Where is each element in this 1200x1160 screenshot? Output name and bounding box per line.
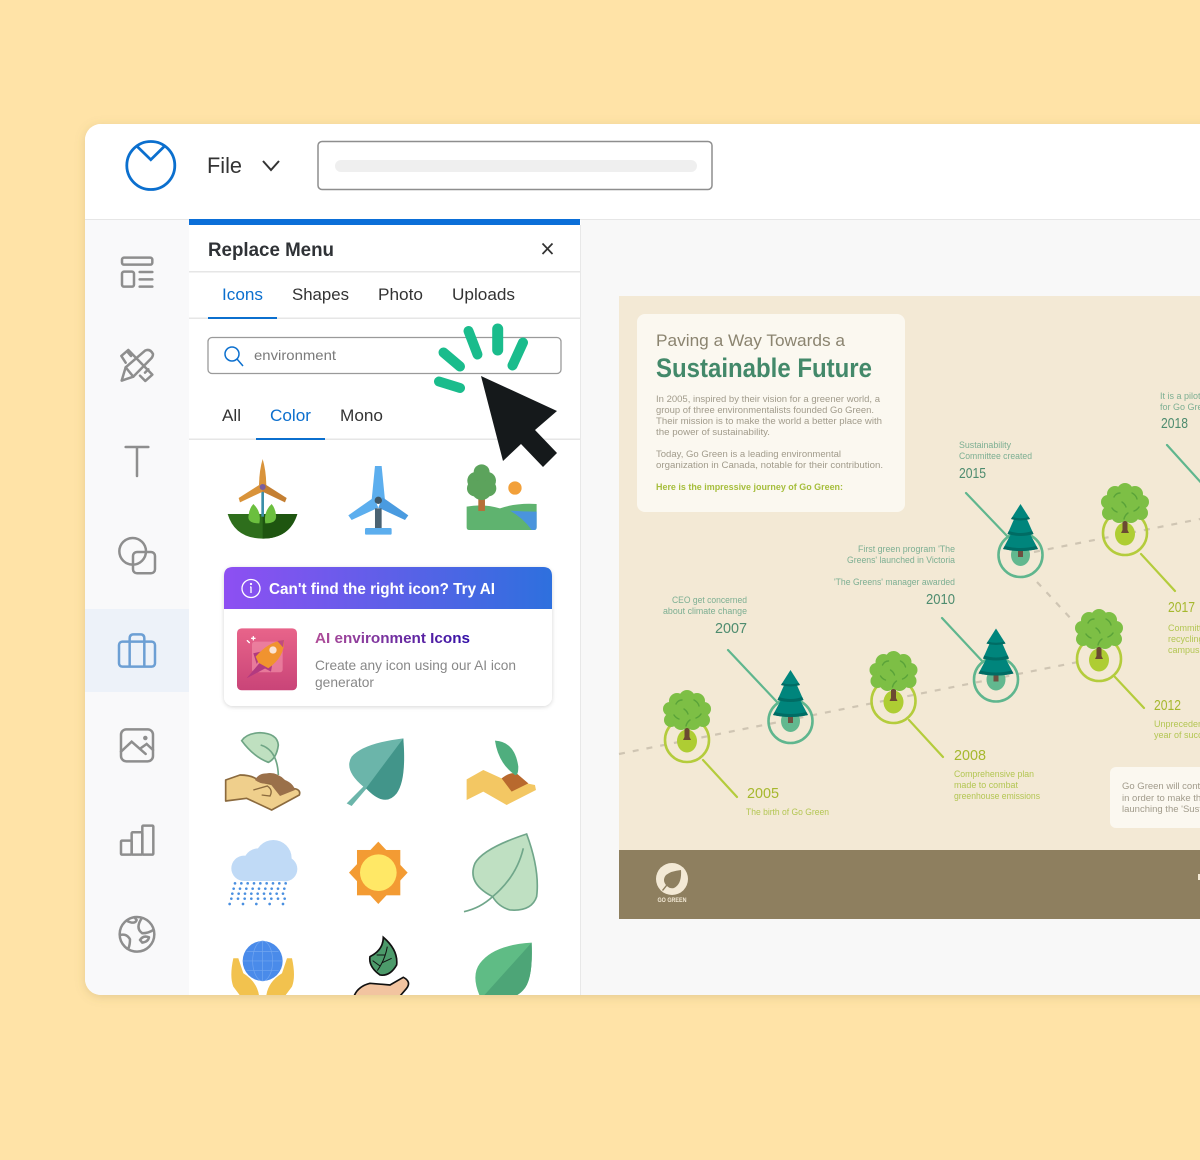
milestone 2007 text: CEO get concerned bbox=[672, 595, 747, 605]
milestone 2005 text bbox=[746, 785, 829, 817]
icon: image bbox=[121, 729, 153, 761]
app window bbox=[85, 124, 1200, 1000]
milestone 2007 text: 2007 bbox=[715, 620, 747, 637]
icon: rain cloud bbox=[230, 840, 297, 904]
milestone 2012 tree bbox=[1075, 609, 1123, 681]
card description: Create any icon using our AI icon bbox=[315, 657, 516, 673]
rocket thumbnail bbox=[237, 628, 297, 690]
icon: landscape bbox=[467, 464, 537, 530]
milestone 2010 text: 'The Greens' manager awarded bbox=[834, 577, 955, 587]
milestone 2007 text bbox=[663, 595, 747, 637]
card description: generator bbox=[315, 674, 374, 690]
milestone 2015 text: Committee created bbox=[959, 451, 1032, 461]
footer logo: GO GREEN bbox=[658, 898, 686, 904]
milestone 2010 text: 2010 bbox=[926, 591, 955, 608]
icon: green click sparks bbox=[439, 329, 523, 388]
intro body: group of three environmentalists founded Go Green. bbox=[656, 405, 874, 415]
sidebar bbox=[85, 219, 189, 995]
icon: teal leaf bbox=[347, 738, 404, 806]
milestone 2007 tree bbox=[768, 670, 812, 743]
info icon bbox=[242, 580, 260, 598]
close icon bbox=[542, 244, 552, 254]
icon: design tools bbox=[121, 350, 153, 381]
milestone 2012 text: 2012 bbox=[1154, 697, 1181, 714]
heading: Replace Menu bbox=[208, 240, 334, 261]
card description bbox=[315, 657, 516, 690]
tabs: Photo bbox=[378, 285, 423, 304]
intro body: the power of sustainability. bbox=[656, 427, 770, 437]
icon: hands holding globe bbox=[231, 941, 294, 1000]
closing note card bbox=[1110, 767, 1200, 828]
icon: outlined light leaf bbox=[464, 834, 537, 912]
milestone 2017 tree bbox=[1101, 483, 1149, 555]
footer band bbox=[619, 850, 1200, 919]
milestone 2015 text: Sustainability bbox=[959, 440, 1011, 450]
intro body: Their mission is to make the world a better place with bbox=[656, 416, 882, 426]
logo bbox=[127, 142, 175, 190]
intro body bbox=[656, 394, 883, 470]
milestone 2008 text: made to combat bbox=[954, 780, 1018, 790]
icon: yellow hand with seedling bbox=[467, 741, 536, 805]
card title: AI environment Icons bbox=[315, 630, 470, 647]
milestone 2008 tree bbox=[870, 651, 918, 723]
milestone 2010 text: Greens' launched in Victoria bbox=[847, 555, 955, 565]
search box bbox=[208, 338, 561, 374]
icon: hand with sprout bbox=[226, 733, 300, 810]
icon: wind turbine with leaves bbox=[228, 459, 297, 539]
milestone 2007 text: about climate change bbox=[663, 606, 747, 616]
filter tabs: Color bbox=[270, 406, 311, 425]
icon: text bbox=[126, 447, 148, 476]
milestone 2010 text bbox=[834, 544, 955, 608]
intro heading: Paving a Way Towards a bbox=[656, 331, 846, 350]
leader lines bbox=[703, 445, 1200, 797]
icon: templates bbox=[122, 258, 152, 287]
icon: blue wind turbine bbox=[348, 466, 408, 535]
icon: green leaf bbox=[475, 943, 532, 1000]
icon: sun bbox=[349, 842, 408, 904]
icon: mouse cursor arrow bbox=[481, 376, 557, 467]
panel: infographic document bbox=[619, 296, 1200, 919]
filter tabs: All bbox=[222, 406, 241, 425]
icon: chart bbox=[121, 826, 153, 855]
milestone 2015 text bbox=[959, 440, 1032, 482]
AI suggestion card bbox=[224, 567, 552, 706]
intro body: In 2005, inspired by their vision for a greener world, a bbox=[656, 394, 880, 404]
milestone 2008 text: Comprehensive plan bbox=[954, 769, 1034, 779]
card header bbox=[224, 567, 552, 609]
intro body: Today, Go Green is a leading environmental bbox=[656, 449, 841, 459]
milestone 2010 text: First green program 'The bbox=[858, 544, 955, 554]
milestone 2015 text: 2015 bbox=[959, 465, 986, 482]
icon: globe bbox=[120, 917, 154, 952]
milestone 2018 text bbox=[1160, 391, 1200, 432]
tabs bbox=[224, 288, 514, 304]
milestone 2005 tree bbox=[663, 690, 711, 762]
tabs: Shapes bbox=[292, 285, 349, 304]
tabs: Icons bbox=[222, 285, 263, 304]
milestone 2018 text: 2018 bbox=[1161, 415, 1188, 432]
intro call to action: Here is the impressive journey of Go Green: bbox=[656, 482, 843, 492]
milestone 2005 text: 2005 bbox=[747, 785, 779, 802]
icon: shapes bbox=[119, 538, 155, 573]
milestone 2008 text: greenhouse emissions bbox=[954, 791, 1040, 801]
card header text: Can't find the right icon? Try AI bbox=[269, 581, 495, 598]
intro body: organization in Canada, notable for their contribution. bbox=[656, 460, 883, 470]
panel: replace menu bbox=[189, 219, 580, 1000]
tabs: Uploads bbox=[452, 285, 515, 304]
milestone 2005 text: The birth of Go Green bbox=[746, 807, 829, 817]
milestone 2008 text bbox=[954, 747, 1040, 801]
milestone 2017 text bbox=[1168, 599, 1200, 655]
filter tabs bbox=[222, 409, 382, 421]
file menu: File bbox=[207, 153, 242, 178]
icon: leaf over outlined hand bbox=[353, 937, 409, 1000]
milestone 2010 tree bbox=[974, 628, 1018, 702]
icon: elements briefcase bbox=[119, 634, 155, 667]
timeline dashed path bbox=[619, 519, 1200, 754]
canvas area bbox=[581, 219, 1200, 995]
milestone 2008 text: 2008 bbox=[954, 747, 986, 764]
filter tabs: Mono bbox=[340, 406, 383, 425]
milestone 2017 text: campus bbox=[1168, 645, 1200, 655]
search box: environment bbox=[254, 347, 336, 363]
chevron bbox=[263, 161, 279, 170]
title input bbox=[318, 142, 712, 190]
intro title: Sustainable Future bbox=[656, 353, 872, 383]
header bar bbox=[85, 124, 1200, 220]
intro card bbox=[637, 314, 905, 512]
app window shadow bbox=[85, 124, 1200, 995]
milestone 2015 tree bbox=[998, 504, 1042, 577]
footer logo bbox=[656, 863, 688, 904]
milestone 2012 text bbox=[1154, 697, 1200, 740]
